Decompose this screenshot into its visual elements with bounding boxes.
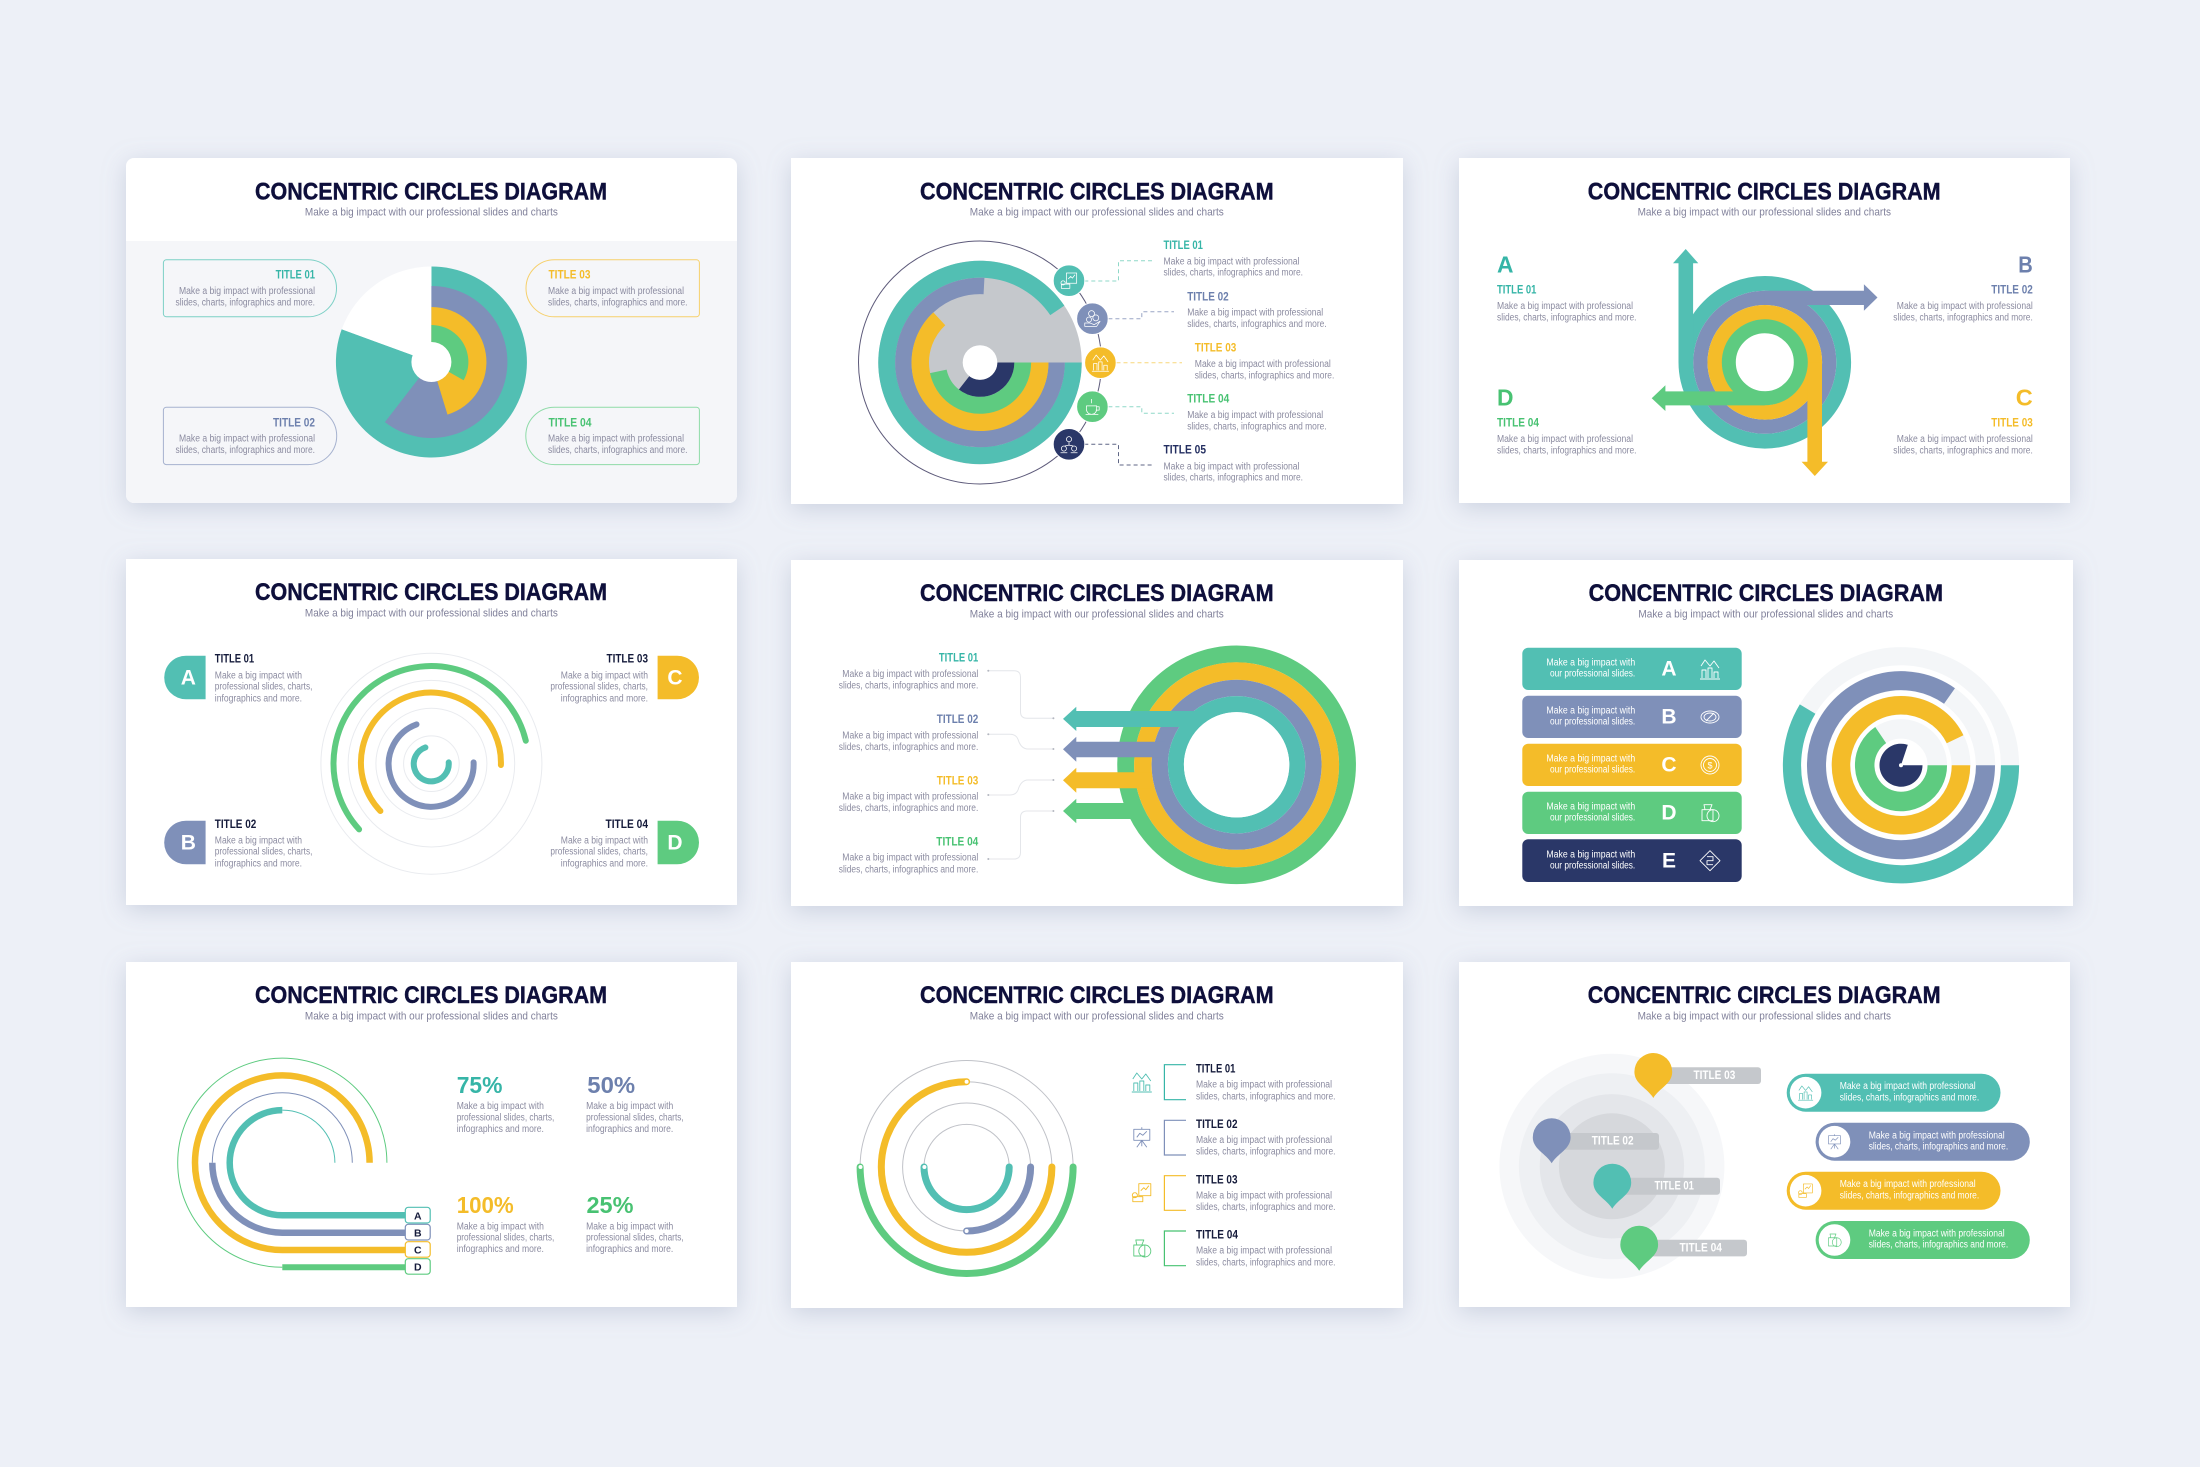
pill: yellow: Make a big impact with professional <box>1840 1179 1976 1190</box>
pin: title 01: TITLE 01 <box>1654 1181 1694 1193</box>
list item: title 02: slides, charts, infographics and more. <box>1196 1147 1336 1158</box>
arrow ring: yellow <box>1715 312 1828 476</box>
pill: green: slides, charts, infographics and more. <box>1869 1240 2008 1251</box>
text block: title 05: slides, charts, infographics and more. <box>1164 473 1303 484</box>
text block: D <box>1497 385 1636 456</box>
grey concentric discs <box>1499 1054 1724 1279</box>
stat: 75%: 75% <box>457 1072 502 1098</box>
subtitle: Make a big impact with our professional slides and charts <box>970 1011 1224 1023</box>
pin: title 03: TITLE 03 <box>1694 1070 1735 1082</box>
ring chart <box>858 241 1102 484</box>
panel: icon rings slide <box>791 158 1403 504</box>
list item: title 02: TITLE 02 <box>1196 1119 1238 1131</box>
text block: title 01: TITLE 01 <box>215 654 255 666</box>
callout: title 01 <box>163 260 336 317</box>
text block: D: slides, charts, infographics and more. <box>1497 445 1636 456</box>
text block: title 01: Make a big impact with professional <box>1164 256 1300 267</box>
text block: title 01 <box>839 653 979 691</box>
stat: 25%: 25% <box>586 1192 634 1218</box>
text block: title 02 <box>839 714 978 753</box>
title: CONCENTRIC CIRCLES DIAGRAM <box>255 178 607 205</box>
callout: title 03: slides, charts, infographics and more. <box>548 297 688 308</box>
list item: title 01: Make a big impact with professional <box>1196 1080 1332 1091</box>
arrow ring: green <box>1652 326 1801 411</box>
bar: D: Make a big impact with <box>1546 801 1635 812</box>
callout: title 02: TITLE 02 <box>273 417 315 429</box>
text block: title 02: TITLE 02 <box>937 714 978 726</box>
badge: D <box>658 821 699 864</box>
text block: title 03: Make a big impact with professional <box>842 792 978 803</box>
stat: 100%: 100% <box>457 1192 514 1218</box>
callout: title 04: slides, charts, infographics and more. <box>548 445 688 456</box>
text block: title 01 <box>1164 240 1303 279</box>
label box: C: C <box>414 1244 422 1256</box>
subtitle: Make a big impact with our professional slides and charts <box>970 207 1224 219</box>
text block: title 02: Make a big impact with professional <box>842 730 978 741</box>
panel: pie callouts slide <box>126 158 737 503</box>
text block: title 04: TITLE 04 <box>606 819 649 831</box>
list item: title 04: TITLE 04 <box>1196 1230 1239 1242</box>
text block: title 03: slides, charts, infographics and more. <box>1195 370 1334 381</box>
title: CONCENTRIC CIRCLES DIAGRAM <box>1588 178 1941 205</box>
text block: title 05 <box>1164 445 1303 484</box>
text block: title 02: professional slides, charts, <box>215 847 312 858</box>
text block: B: TITLE 02 <box>1991 285 2033 297</box>
text block: D: Make a big impact with professional <box>1497 434 1633 445</box>
callout: title 03: TITLE 03 <box>548 270 590 282</box>
text block: A: Make a big impact with professional <box>1497 301 1633 312</box>
bar: A <box>1522 648 1742 690</box>
list item: title 02 <box>1134 1119 1336 1158</box>
bar: B: our professional slides. <box>1550 717 1635 728</box>
pill: green <box>1816 1221 2030 1259</box>
text block: title 01: slides, charts, infographics and more. <box>839 680 978 691</box>
ring and arrow diagram <box>1063 654 1348 876</box>
list item: title 02: Make a big impact with professional <box>1196 1135 1332 1146</box>
text block: C: Make a big impact with professional <box>1897 434 2033 445</box>
text block: A: TITLE 01 <box>1497 285 1537 297</box>
text block: title 01: Make a big impact with professional <box>842 669 978 680</box>
callout: title 02: Make a big impact with professional <box>179 434 315 445</box>
label box: B: B <box>414 1227 422 1239</box>
title: CONCENTRIC CIRCLES DIAGRAM <box>920 982 1274 1009</box>
icon: network <box>1053 428 1085 460</box>
label box: B <box>405 1224 430 1240</box>
subtitle: Make a big impact with our professional slides and charts <box>970 609 1224 621</box>
subtitle: Make a big impact with our professional slides and charts <box>305 608 558 620</box>
text block: title 02 <box>1187 291 1327 330</box>
panel: rainbow track slide <box>126 962 737 1307</box>
stat: 75% <box>457 1072 554 1135</box>
bar: A: our professional slides. <box>1550 669 1635 680</box>
bar: C <box>1522 744 1742 786</box>
pin: title 04 <box>1620 1226 1747 1271</box>
pin: title 04: TITLE 04 <box>1679 1243 1722 1255</box>
bar: C: our professional slides. <box>1550 765 1635 776</box>
bar: A: A <box>1661 658 1677 681</box>
list item: title 04: Make a big impact with professional <box>1196 1246 1332 1257</box>
pill: purple: Make a big impact with professional <box>1869 1130 2005 1141</box>
pin: title 03 <box>1634 1053 1761 1098</box>
title: CONCENTRIC CIRCLES DIAGRAM <box>920 580 1274 607</box>
bar: D: our professional slides. <box>1550 813 1635 824</box>
text block: title 04: slides, charts, infographics and more. <box>839 864 978 875</box>
panel: map pins slide <box>1459 962 2070 1307</box>
label box: A <box>405 1207 430 1223</box>
pin: title 01 <box>1593 1164 1720 1209</box>
callout: title 02 <box>163 407 337 465</box>
title: CONCENTRIC CIRCLES DIAGRAM <box>255 579 607 606</box>
text block: title 04: professional slides, charts, <box>550 847 648 858</box>
pin: title 02 <box>1533 1118 1659 1163</box>
title: CONCENTRIC CIRCLES DIAGRAM <box>255 982 607 1009</box>
label box: D: D <box>414 1261 422 1273</box>
radial progress chart <box>1792 656 2010 874</box>
text block: title 04: TITLE 04 <box>1187 394 1230 406</box>
text block: title 01: slides, charts, infographics and more. <box>1164 268 1303 279</box>
badge: D: D <box>667 831 682 854</box>
ring chart <box>858 1060 1073 1274</box>
pill: yellow <box>1787 1172 2000 1210</box>
callout: title 04: Make a big impact with professional <box>548 434 684 445</box>
list item: title 01: slides, charts, infographics and more. <box>1196 1091 1336 1102</box>
panel: ring arrows slide <box>791 560 1403 906</box>
pill: teal: Make a big impact with professional <box>1840 1081 1976 1092</box>
badge: C <box>658 656 699 699</box>
text block: title 03 <box>1195 343 1334 381</box>
list item: title 03: slides, charts, infographics and more. <box>1196 1202 1336 1213</box>
pill: purple: slides, charts, infographics and more. <box>1869 1142 2008 1153</box>
callout: title 04: TITLE 04 <box>548 417 592 429</box>
text block: title 02: infographics and more. <box>215 858 302 869</box>
text block: title 01: TITLE 01 <box>1164 240 1203 252</box>
text block: title 04: Make a big impact with professional <box>842 853 978 864</box>
label box: C <box>405 1242 430 1257</box>
panel: five bars slide <box>1459 560 2073 906</box>
text block: B: Make a big impact with professional <box>1897 301 2033 312</box>
callout: title 03: Make a big impact with professional <box>548 286 684 297</box>
text block: C: C <box>2016 385 2033 411</box>
list item: title 01: TITLE 01 <box>1196 1064 1236 1076</box>
pin: title 02: TITLE 02 <box>1592 1136 1634 1148</box>
stat: 25%: infographics and more. <box>586 1244 673 1255</box>
badge: A <box>164 656 206 699</box>
stat: 50%: infographics and more. <box>586 1124 673 1135</box>
text block: title 02: Make a big impact with <box>215 835 302 846</box>
text block: D: D <box>1497 385 1514 411</box>
text block: title 03: Make a big impact with professional <box>1195 359 1331 370</box>
text block: title 03: TITLE 03 <box>606 654 648 666</box>
icon: coffee cup <box>1077 391 1108 423</box>
stat: 75%: Make a big impact with <box>457 1101 544 1112</box>
stat: 100% <box>457 1192 554 1255</box>
stat: 100%: infographics and more. <box>457 1244 544 1255</box>
callout: title 01: Make a big impact with professional <box>179 286 315 297</box>
panel: thin rings slide <box>791 962 1403 1308</box>
callout: title 03 <box>526 260 699 317</box>
dashed connectors <box>1084 261 1182 465</box>
badge: C: C <box>667 666 682 689</box>
subtitle: Make a big impact with our professional slides and charts <box>305 1011 558 1023</box>
text block: title 01: TITLE 01 <box>939 653 979 665</box>
text block: title 01: infographics and more. <box>215 693 302 704</box>
callout: title 01: slides, charts, infographics and more. <box>176 297 315 308</box>
text block: C <box>1893 385 2033 456</box>
callout: title 01: TITLE 01 <box>276 270 315 282</box>
bar: C: $ <box>1707 760 1713 770</box>
panel: spiral arrows slide <box>1459 158 2070 503</box>
pill: purple <box>1816 1123 2030 1161</box>
text block: title 04: TITLE 04 <box>936 836 979 848</box>
bar: E: E <box>1662 850 1676 873</box>
text block: title 01: professional slides, charts, <box>215 682 312 693</box>
callout: title 04 <box>526 407 699 465</box>
arrow ring: purple <box>1700 284 1878 427</box>
text block: title 02: TITLE 02 <box>215 819 256 831</box>
text block: title 03: infographics and more. <box>561 693 648 704</box>
text block: title 02: slides, charts, infographics and more. <box>1187 319 1327 330</box>
bar: B <box>1522 696 1742 738</box>
callout: title 02: slides, charts, infographics and more. <box>176 445 315 456</box>
text block: title 02: Make a big impact with professional <box>1187 308 1323 319</box>
title: CONCENTRIC CIRCLES DIAGRAM <box>1589 580 1943 607</box>
label box: A: A <box>414 1210 422 1222</box>
text block: title 03 <box>550 654 648 704</box>
stat: 25%: Make a big impact with <box>586 1221 673 1232</box>
bar: C: Make a big impact with <box>1546 753 1635 764</box>
text block: C: slides, charts, infographics and more. <box>1893 445 2033 456</box>
stat: 50%: Make a big impact with <box>586 1101 673 1112</box>
arc chart <box>321 653 542 874</box>
text block: title 04: infographics and more. <box>561 858 648 869</box>
text block: title 04 <box>550 819 649 869</box>
stat: 100%: professional slides, charts, <box>457 1233 554 1244</box>
bar: E: Make a big impact with <box>1546 849 1635 860</box>
text block: title 05: TITLE 05 <box>1164 445 1207 457</box>
badge: B <box>164 821 206 864</box>
subtitle: Make a big impact with our professional slides and charts <box>305 207 558 219</box>
stat: 75%: infographics and more. <box>457 1124 544 1135</box>
text block: B: slides, charts, infographics and more. <box>1893 312 2033 323</box>
bar: D: D <box>1661 802 1677 825</box>
track chart <box>178 1058 406 1267</box>
text block: B: B <box>2018 252 2033 278</box>
text block: title 03: TITLE 03 <box>937 775 978 787</box>
text block: A: slides, charts, infographics and more. <box>1497 312 1636 323</box>
icon: chart <box>1085 347 1116 379</box>
text block: title 04 <box>839 836 979 875</box>
list item: title 01 <box>1132 1064 1336 1102</box>
text block: title 03: TITLE 03 <box>1195 343 1236 355</box>
text block: A <box>1497 252 1636 323</box>
text block: title 03: professional slides, charts, <box>550 682 648 693</box>
pie chart <box>336 266 527 458</box>
bar: C: C <box>1661 754 1677 777</box>
list item: title 03: Make a big impact with professional <box>1196 1190 1332 1201</box>
text block: title 03: Make a big impact with <box>561 670 648 681</box>
icon: presentation <box>1053 265 1085 297</box>
label box: D <box>405 1259 430 1274</box>
pill: green: Make a big impact with professional <box>1869 1228 2005 1239</box>
subtitle: Make a big impact with our professional slides and charts <box>1638 609 1894 621</box>
stat: 100%: Make a big impact with <box>457 1221 544 1232</box>
text block: title 03: slides, charts, infographics and more. <box>839 803 978 814</box>
badge: A: A <box>181 666 196 689</box>
title: CONCENTRIC CIRCLES DIAGRAM <box>920 178 1274 205</box>
bar: B: B <box>1661 706 1677 729</box>
bar: B: Make a big impact with <box>1546 705 1635 716</box>
pill: yellow: slides, charts, infographics and more. <box>1840 1191 1979 1202</box>
text block: title 04: Make a big impact with professional <box>1187 410 1323 421</box>
list item: title 03 <box>1132 1174 1336 1213</box>
text block: A: A <box>1497 252 1514 278</box>
bar: A: Make a big impact with <box>1546 657 1635 668</box>
stat: 25% <box>586 1192 684 1255</box>
text block: title 01 <box>215 654 312 704</box>
text block: title 04 <box>1187 394 1327 432</box>
text block: B <box>1893 252 2033 323</box>
stat: 75%: professional slides, charts, <box>457 1113 554 1124</box>
bar: E: our professional slides. <box>1550 861 1635 872</box>
icon: coins in hand <box>1077 303 1108 335</box>
badge: B: B <box>181 831 196 854</box>
connector lines <box>987 670 1054 860</box>
pill: teal: slides, charts, infographics and more. <box>1840 1092 1979 1103</box>
list item: title 04: slides, charts, infographics and more. <box>1196 1257 1336 1268</box>
panel: spiral arcs slide <box>126 559 737 905</box>
text block: C: TITLE 03 <box>1991 418 2033 430</box>
text block: title 04: slides, charts, infographics and more. <box>1187 421 1327 432</box>
pill: teal <box>1787 1074 2000 1112</box>
subtitle: Make a big impact with our professional slides and charts <box>1638 207 1891 219</box>
text block: title 03 <box>839 775 978 814</box>
list item: title 03: TITLE 03 <box>1196 1174 1238 1186</box>
arrow ring: teal <box>1673 249 1844 441</box>
stat: 50%: professional slides, charts, <box>586 1113 684 1124</box>
text block: title 02 <box>215 819 312 869</box>
bar: D <box>1522 792 1742 834</box>
list item: title 04 <box>1134 1230 1336 1268</box>
text block: title 04: Make a big impact with <box>561 835 648 846</box>
subtitle: Make a big impact with our professional slides and charts <box>1638 1010 1891 1022</box>
text block: title 02: slides, charts, infographics and more. <box>839 742 978 753</box>
stat: 50% <box>586 1072 684 1135</box>
text block: title 02: TITLE 02 <box>1187 291 1229 303</box>
text block: title 05: Make a big impact with professional <box>1164 461 1300 472</box>
stat: 50%: 50% <box>587 1072 635 1098</box>
title: CONCENTRIC CIRCLES DIAGRAM <box>1588 982 1941 1009</box>
stat: 25%: professional slides, charts, <box>586 1233 684 1244</box>
bar: E <box>1522 839 1742 882</box>
text block: title 01: Make a big impact with <box>215 670 302 681</box>
text block: D: TITLE 04 <box>1497 418 1540 430</box>
